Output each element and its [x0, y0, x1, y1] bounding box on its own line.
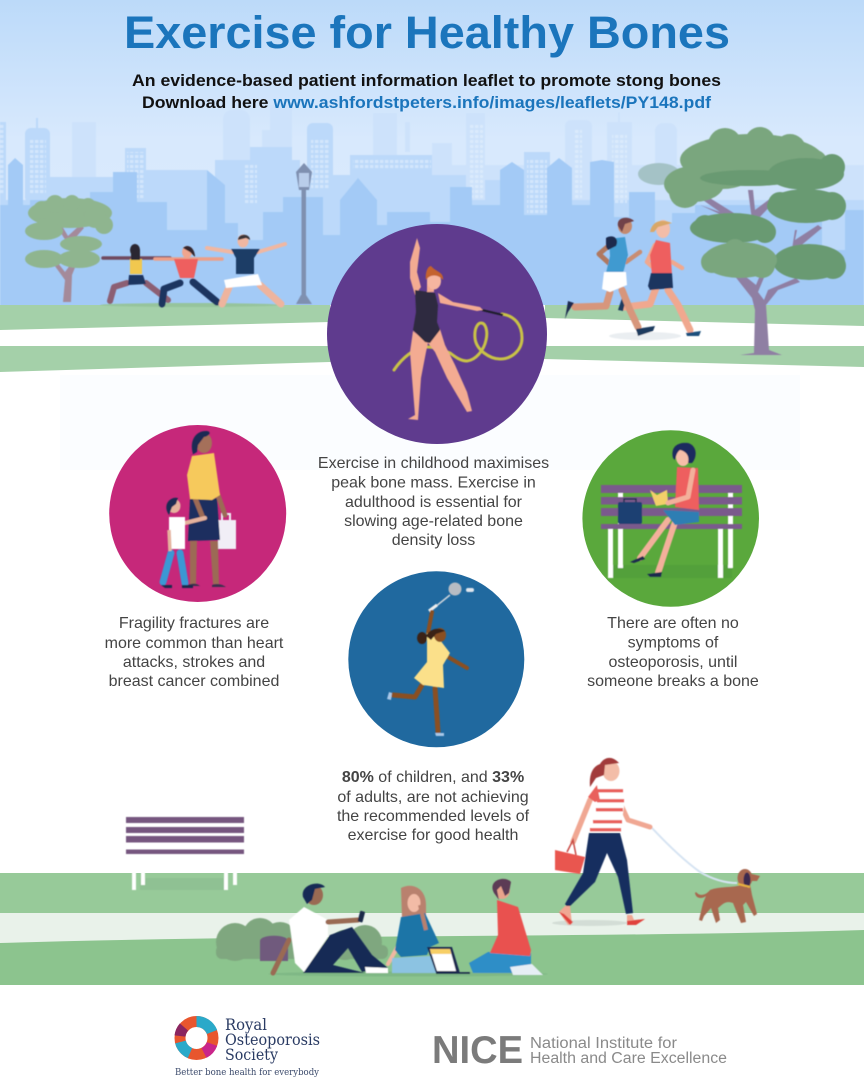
man with phone	[273, 884, 388, 973]
text: fragility fractures	[105, 615, 284, 690]
footer background	[0, 985, 864, 1080]
large tree right	[638, 127, 846, 355]
text: childhood exercise: adulthood is essential for	[345, 494, 523, 511]
text: childhood exercise: peak bone mass. Exercise in	[331, 474, 536, 492]
ground bands: lower park	[0, 873, 864, 985]
text: no symptoms	[587, 615, 759, 690]
text: no symptoms: osteoporosis, until	[609, 654, 737, 671]
ring emblem	[180, 1021, 213, 1054]
sky background	[0, 0, 864, 310]
text: fragility fractures: breast cancer combined	[109, 673, 279, 690]
download link line: Download here www.ashfordstpeters.info/images/leaflets/PY148.pdf	[142, 93, 711, 112]
title: Exercise for Healthy Bones	[124, 7, 730, 58]
text: activity statistic	[337, 769, 530, 844]
woman walking dog	[552, 758, 737, 926]
logo: Royal Osteoporosis Society: Better bone health for everybody	[175, 1068, 320, 1078]
bush	[216, 918, 388, 961]
faint band behind text	[60, 375, 800, 470]
text: childhood exercise: slowing age-related bone	[344, 513, 523, 530]
logo: NICE: National Institute for	[530, 1035, 677, 1052]
text: no symptoms: symptoms of	[628, 634, 719, 652]
text: activity statistic: of adults, are not achieving	[337, 789, 529, 806]
runners	[565, 218, 701, 340]
logo: NICE: NICE	[432, 1029, 523, 1072]
logo: Royal Osteoporosis Society: Royal	[225, 1016, 267, 1034]
text: childhood exercise: Exercise in childhood maximises	[318, 455, 549, 472]
empty bench	[126, 817, 244, 890]
panel: badminton player circle	[348, 571, 524, 747]
legs	[565, 833, 633, 914]
logo: Royal Osteoporosis Society: Society	[225, 1046, 278, 1064]
woman with laptop	[388, 886, 470, 974]
text: fragility fractures: attacks, strokes and	[123, 654, 265, 671]
text: no symptoms: someone breaks a bone	[587, 673, 759, 690]
panel: woman reading on bench circle	[582, 430, 759, 607]
logo: Royal Osteoporosis Society: Osteoporosis	[225, 1031, 320, 1049]
striped shirt	[588, 783, 624, 832]
logo: NICE	[432, 1029, 727, 1072]
woman runner	[618, 220, 701, 336]
lamp post	[296, 163, 312, 304]
logo: Royal Osteoporosis Society	[175, 1016, 320, 1078]
panel: childhood exercise gymnast circle	[327, 224, 547, 444]
subtitle line one: An evidence-based patient information leaflet to promote stong bones	[132, 71, 721, 90]
logo: NICE: Health and Care Excellence	[530, 1050, 727, 1067]
text: activity statistic: exercise for good health	[348, 827, 518, 844]
seated friends	[260, 879, 548, 976]
man in red sweater	[469, 879, 543, 975]
text: fragility fractures: Fragility fractures are	[119, 615, 269, 632]
text: activity statistic: 80% of children, and 33%	[342, 769, 524, 786]
lead	[652, 828, 737, 883]
small tree left	[25, 195, 113, 302]
ground bands: upper park	[0, 305, 864, 375]
city skyline	[0, 105, 864, 310]
dog	[695, 869, 760, 923]
handbag	[567, 840, 576, 855]
backpack	[260, 936, 288, 961]
man runner	[565, 218, 655, 336]
text: no symptoms: There are often no	[607, 615, 739, 632]
text: childhood exercise: density loss	[392, 532, 475, 549]
text: fragility fractures: more common than heart	[105, 635, 284, 652]
text: activity statistic: the recommended levels of	[337, 808, 530, 825]
ribbon	[394, 314, 522, 370]
yoga group	[100, 234, 285, 307]
panel: mother and child circle	[109, 425, 286, 602]
text: childhood exercise	[318, 455, 549, 549]
